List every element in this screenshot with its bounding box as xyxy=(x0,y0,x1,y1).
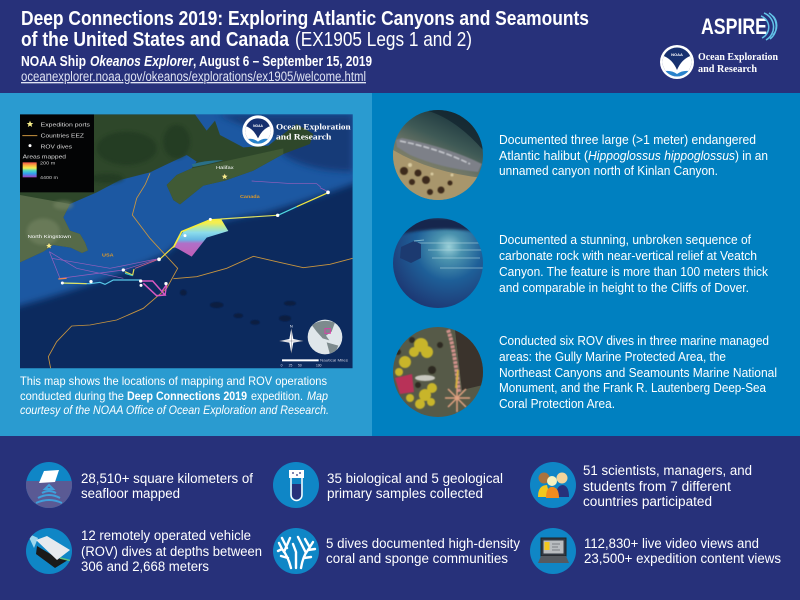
stat text: ROV dives xyxy=(81,528,262,574)
statistics band background xyxy=(0,436,800,600)
map caption: Map xyxy=(307,389,328,403)
subtitle: NOAA Ship xyxy=(21,53,86,70)
stat text: participants: countries participated xyxy=(583,494,712,509)
stat text: participants xyxy=(583,463,752,509)
survey tracks xyxy=(58,188,329,296)
stat text: seafloor mapped: seafloor mapped xyxy=(81,486,180,501)
map caption: This map shows the locations of mapping and ROV operations xyxy=(20,374,327,388)
scale bar xyxy=(280,359,348,366)
scale bar: 0 xyxy=(281,363,283,367)
stat icon: laptop xyxy=(530,528,576,574)
stat text: coral communities: coral and sponge communities xyxy=(326,551,508,566)
header band xyxy=(0,0,800,93)
map logo xyxy=(242,115,351,147)
finding text: marine managed areas: Northeast Canyons and Seamounts Marine National xyxy=(499,366,777,380)
map place labels: Halifax xyxy=(216,165,235,170)
map caption: expedition. xyxy=(251,389,303,403)
map legend: Expedition ports xyxy=(41,122,90,128)
scale bar: 50 xyxy=(298,363,302,367)
map place labels: North Kingstown xyxy=(28,234,72,239)
stat text: samples xyxy=(327,471,503,501)
map place labels: USA xyxy=(102,252,114,257)
stat icon: seafloor mapping xyxy=(26,462,72,508)
map logo: NOAA xyxy=(253,124,263,128)
map legend: 4400 m xyxy=(40,175,58,180)
map caption: courtesy of the NOAA Office of Ocean Exploration and Research. xyxy=(20,403,329,417)
stat text: seafloor mapped xyxy=(81,471,253,501)
ROV dive points xyxy=(61,190,330,287)
stat icon: sample tube xyxy=(273,462,319,508)
expedition link: oceanexplorer.noaa.gov/okeanos/explorations/ex1905/welcome.html xyxy=(21,69,366,84)
stat text: seafloor mapped: 28,510+ square kilometers of xyxy=(81,471,253,486)
subtitle: , August 6 – September 15, 2019 xyxy=(193,53,372,70)
map place labels xyxy=(28,165,260,257)
finding text: marine managed areas: areas: the Gully Marine Protected Area, the xyxy=(499,350,726,364)
finding text: marine managed areas xyxy=(499,334,777,411)
EEZ boundaries xyxy=(48,173,353,368)
scale bar: 25 xyxy=(289,363,293,367)
map legend: 200 m xyxy=(40,160,56,165)
logo: NOAA Ocean Exploration and Research: NOAA xyxy=(671,52,683,57)
expedition port stars xyxy=(46,173,228,249)
subtitle xyxy=(21,53,372,70)
land: New England and Maritimes xyxy=(20,114,313,262)
left map panel background xyxy=(0,93,372,436)
finding text: Atlantic halibut: ) in an xyxy=(735,149,768,163)
finding text: carbonate rock xyxy=(499,233,769,295)
stat text: ROV dives: 12 remotely operated vehicle xyxy=(81,528,251,543)
stat icon: coral xyxy=(273,528,319,574)
right findings panel background xyxy=(372,93,800,436)
logo: NOAA Ocean Exploration and Research: and Research xyxy=(698,63,757,75)
stat text: samples: primary samples collected xyxy=(327,486,483,501)
scale bar: Nautical Miles xyxy=(320,358,348,362)
stat icon: ROV xyxy=(26,528,72,574)
stat icon: people xyxy=(530,462,576,508)
map legend: ROV dives xyxy=(41,144,72,150)
map place labels: Canada xyxy=(240,194,260,199)
title: of the United States and Canada xyxy=(21,28,289,51)
title: (EX1905 Legs 1 and 2) xyxy=(295,28,472,51)
stat text: views: 112,830+ live video views and xyxy=(584,536,759,551)
logo: NOAA Ocean Exploration and Research xyxy=(660,45,778,80)
map caption: Deep Connections 2019 xyxy=(127,389,247,403)
photo: Atlantic halibut xyxy=(393,110,483,200)
title: Deep Connections 2019: Exploring Atlantic Canyons and Seamounts xyxy=(21,7,589,30)
locator globe xyxy=(308,320,342,354)
mapped swath main xyxy=(173,220,228,257)
finding text: carbonate rock: carbonate rock with near-vertical relief at Veatch xyxy=(499,249,757,263)
transit lines xyxy=(49,181,321,278)
finding text: marine managed areas: Coral Protection Area. xyxy=(499,397,615,411)
finding text: carbonate rock: and comparable in height to the Cliffs of Dover. xyxy=(499,281,749,295)
stat text: samples: 35 biological and 5 geological xyxy=(327,471,503,486)
finding text: carbonate rock: Canyon. The feature is more than 100 meters thick xyxy=(499,265,769,279)
finding text: marine managed areas: Conducted six ROV dives in three marine managed xyxy=(499,334,769,348)
map ocean xyxy=(20,114,353,368)
photo: corals in marine managed areas xyxy=(393,327,483,417)
stat text: participants: 51 scientists, managers, and xyxy=(583,463,752,478)
finding text: marine managed areas: Monument, and the Frank R. Lautenberg Deep-Sea xyxy=(499,381,766,395)
stat text: views xyxy=(584,536,781,566)
stat text: coral communities xyxy=(326,536,520,566)
stat text: coral communities: 5 dives documented high-density xyxy=(326,536,520,551)
finding text: carbonate rock: Documented a stunning, unbroken sequence of xyxy=(499,233,752,247)
stat text: ROV dives: (ROV) dives at depths between xyxy=(81,544,262,559)
finding text: Atlantic halibut: unnamed canyon north of Kinlan Canyon. xyxy=(499,164,718,178)
logo: ASPIRE: ASPIRE xyxy=(701,14,767,39)
map caption: conducted during the xyxy=(20,389,124,403)
finding text: Atlantic halibut: Atlantic halibut ( xyxy=(499,149,589,163)
map logo: and Research xyxy=(276,133,332,142)
map logo: Ocean Exploration xyxy=(276,123,351,132)
stat text: participants: students from 7 different xyxy=(583,479,731,494)
title xyxy=(21,7,589,51)
finding text: Atlantic halibut xyxy=(499,133,768,178)
map of expedition xyxy=(10,105,363,368)
map legend: Areas mapped xyxy=(23,154,66,160)
subtitle: Okeanos Explorer xyxy=(90,53,194,70)
logo: NOAA Ocean Exploration and Research: Ocean Exploration xyxy=(698,51,778,63)
stat text: ROV dives: 306 and 2,668 meters xyxy=(81,559,209,574)
north arrow: N xyxy=(290,323,293,328)
finding text: Atlantic halibut: Documented three large (>1 meter) endangered xyxy=(499,133,756,147)
north arrow xyxy=(279,323,303,353)
map legend: Countries EEZ xyxy=(41,134,85,140)
photo: carbonate rock wall with ROV xyxy=(393,218,483,308)
map caption xyxy=(20,374,329,417)
finding text: Atlantic halibut: Hippoglossus hippoglossus xyxy=(588,149,735,163)
stat text: views: 23,500+ expedition content views xyxy=(584,551,781,566)
map legend xyxy=(20,114,94,192)
scale bar: 100 xyxy=(316,363,322,367)
